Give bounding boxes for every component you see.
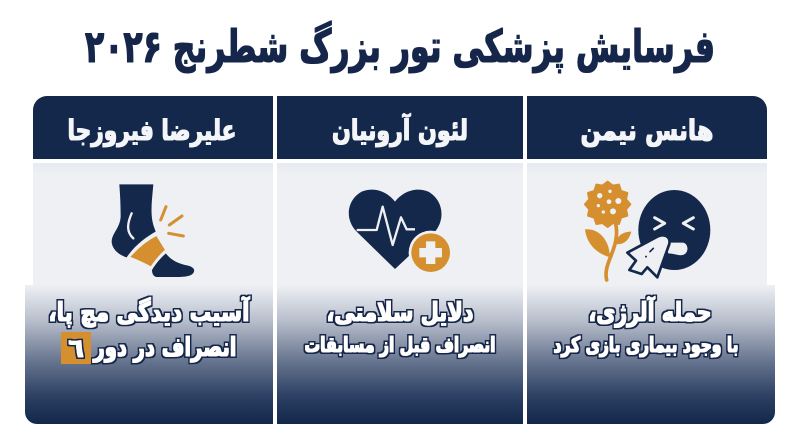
text: Niemann reason: حمله آلرژی،	[588, 296, 712, 328]
text: Firouzja reason: ٦	[68, 334, 84, 364]
text: Niemann reason	[554, 296, 738, 357]
text: Aronian reason: انصراف قبل از مسابقات	[304, 333, 496, 357]
text: Firouzja reason: انصراف در دور	[92, 333, 236, 363]
heading: Firouzja: علیرضا فیروزجا	[68, 114, 236, 147]
panel: table background	[25, 163, 775, 424]
icon: heart with pulse and plus	[349, 190, 453, 275]
text: Firouzja reason: آسیب دیدگی مچ پا،	[48, 296, 250, 328]
heading: Niemann: هانس نیمن	[580, 114, 714, 147]
heading: Aronian: لئون آرونیان	[332, 113, 468, 147]
text: Firouzja reason	[48, 296, 250, 364]
text: Niemann reason: با وجود بیماری بازی کرد	[554, 333, 738, 357]
icon: allergy flower and sneezing face	[585, 182, 710, 280]
icon: injured ankle	[112, 184, 194, 277]
text: Aronian reason	[304, 298, 496, 357]
panel: header row	[33, 96, 767, 159]
text: Aronian reason: دلایل سلامتی،	[326, 298, 474, 328]
